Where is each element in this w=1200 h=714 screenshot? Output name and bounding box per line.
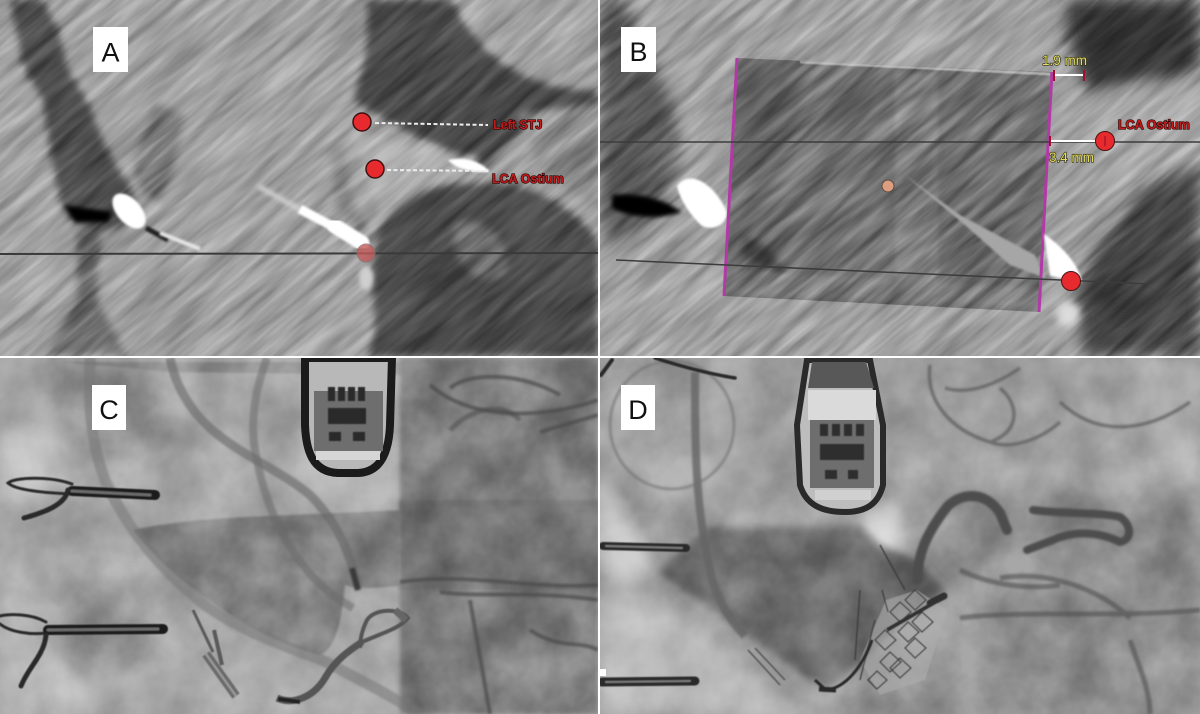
- texture: fluoroscopy mottling: [0, 358, 598, 714]
- measurement plane fill: [724, 58, 1052, 312]
- measurement: 1.9 mm: [1042, 53, 1087, 81]
- label: LCA Ostium: LCA Ostium: [1118, 118, 1190, 132]
- marker: LCA ostium: [366, 160, 564, 186]
- clip device: [193, 610, 236, 696]
- panel D: fluoroscopy after procedure: [600, 358, 1200, 714]
- panel A: CT cross-section with left STJ and LCA ostium: [0, 0, 598, 356]
- label C: [92, 385, 126, 430]
- measurement: 3.4 mm: [1049, 132, 1114, 165]
- label B: B: [629, 37, 648, 67]
- label D: D: [628, 395, 648, 425]
- marker: LCA ostium: LCA Ostium: [492, 172, 564, 186]
- transcatheter valve stent frame: [855, 545, 947, 695]
- label A: A: [101, 38, 120, 68]
- plane edges: [724, 58, 1052, 312]
- marker: annulus point: [1062, 272, 1080, 290]
- texture: CT streaks: [600, 0, 1200, 356]
- contrast streak in plane: [910, 178, 1040, 277]
- shadow: heart silhouette: [658, 526, 945, 691]
- panel C: fluoroscopy before procedure: [0, 358, 598, 714]
- sternal wire top: [8, 478, 155, 518]
- contrast-filled coronary artery: [917, 496, 1129, 580]
- marker: annulus point: [357, 244, 375, 262]
- aortic root outline: [748, 640, 872, 690]
- label C: C: [99, 395, 119, 425]
- sternal wire bottom: [0, 615, 163, 686]
- texture: CT streaks: [0, 0, 598, 356]
- marker: left STJ: [353, 113, 542, 132]
- sternal wires: [601, 358, 735, 682]
- pacemaker device: [797, 360, 883, 512]
- label B: [621, 27, 656, 72]
- marker: left STJ: Left STJ: [493, 118, 542, 132]
- prosthetic valve ring: [277, 610, 408, 702]
- label A: [93, 27, 128, 72]
- panel B: zoomed CT with measurement plane: [600, 0, 1200, 356]
- measurement: 3.4 mm: 3.4 mm: [1049, 150, 1094, 165]
- measurement: 1.9 mm: 1.9 mm: [1042, 53, 1087, 68]
- texture: fluoroscopy mottling: [600, 358, 1200, 714]
- label D: [621, 385, 655, 430]
- device: pacemaker: [305, 358, 392, 473]
- centre point: [882, 180, 894, 192]
